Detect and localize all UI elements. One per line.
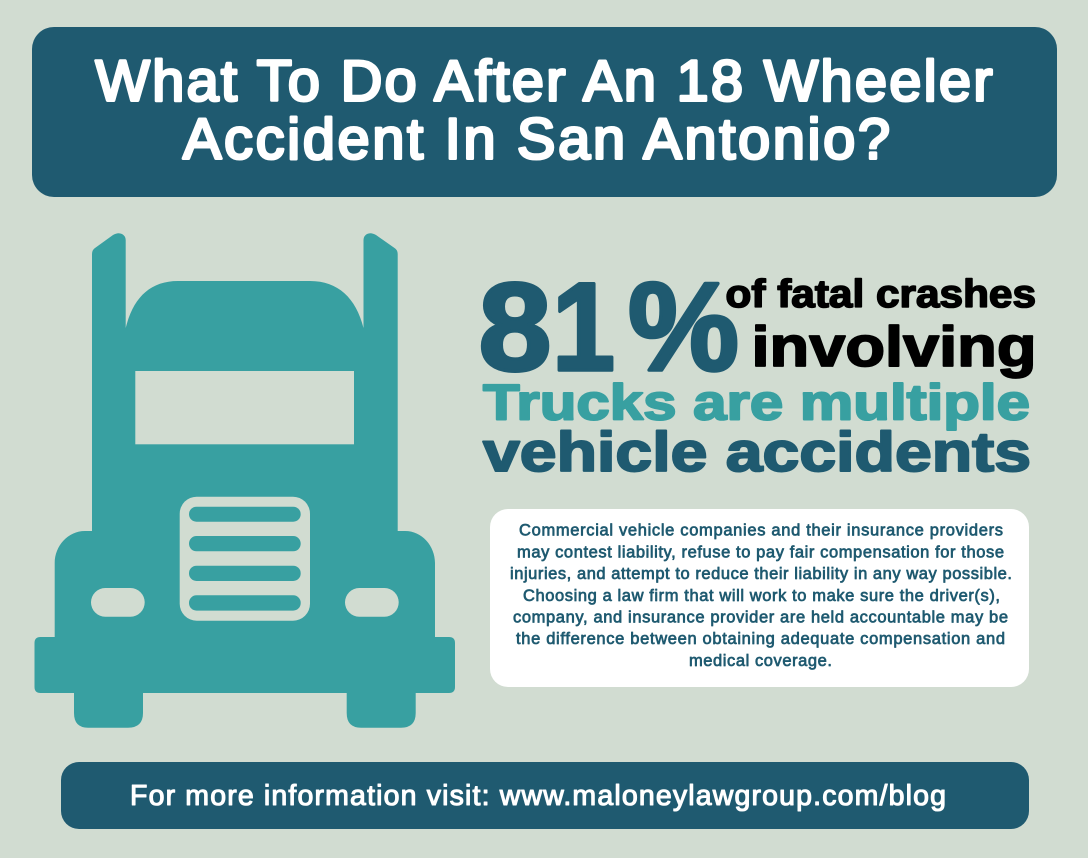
- footer link text: For more information visit: www.maloneylawgroup.com/blog: [130, 780, 946, 812]
- title banner: [32, 27, 1057, 197]
- icon: semi truck front view: [34, 233, 455, 728]
- title: [96, 50, 992, 172]
- statistic headline: [478, 258, 1036, 483]
- body paragraph: Choosing a law firm that will work to make sure the driver(s),: [523, 587, 1000, 605]
- involving: involving: [752, 315, 1036, 379]
- body paragraph: company, and insurance provider are held accountable may be: [513, 608, 1008, 626]
- truck grille: [180, 497, 310, 621]
- body paragraph: medical coverage.: [689, 652, 832, 670]
- body paragraph: [510, 522, 1012, 670]
- truck right headlight: [345, 588, 399, 617]
- body paragraph: Commercial vehicle companies and their insurance providers: [519, 522, 1003, 540]
- 81 percent figure: %: [628, 258, 739, 397]
- 81 percent figure: [478, 258, 739, 397]
- body paragraph: the difference between obtaining adequate compensation and: [516, 630, 1005, 648]
- vehicle accidents: vehicle accidents: [483, 420, 1031, 483]
- truck left headlight: [91, 588, 145, 617]
- trucks are multiple: Trucks are multiple: [483, 374, 1030, 430]
- 81 percent figure: 8: [478, 258, 552, 397]
- panel: explanatory text: [490, 509, 1029, 687]
- title: Accident In San Antonio?: [183, 108, 890, 172]
- of fatal crashes: of fatal crashes: [726, 273, 1036, 316]
- truck windshield: [135, 371, 354, 444]
- footer banner: [61, 762, 1029, 829]
- body paragraph: injuries, and attempt to reduce their liability in any way possible.: [510, 565, 1012, 583]
- 81 percent figure: 1: [552, 258, 615, 397]
- title: What To Do After An 18 Wheeler: [96, 50, 992, 114]
- body paragraph: may contest liability, refuse to pay fair compensation for those: [517, 544, 1004, 562]
